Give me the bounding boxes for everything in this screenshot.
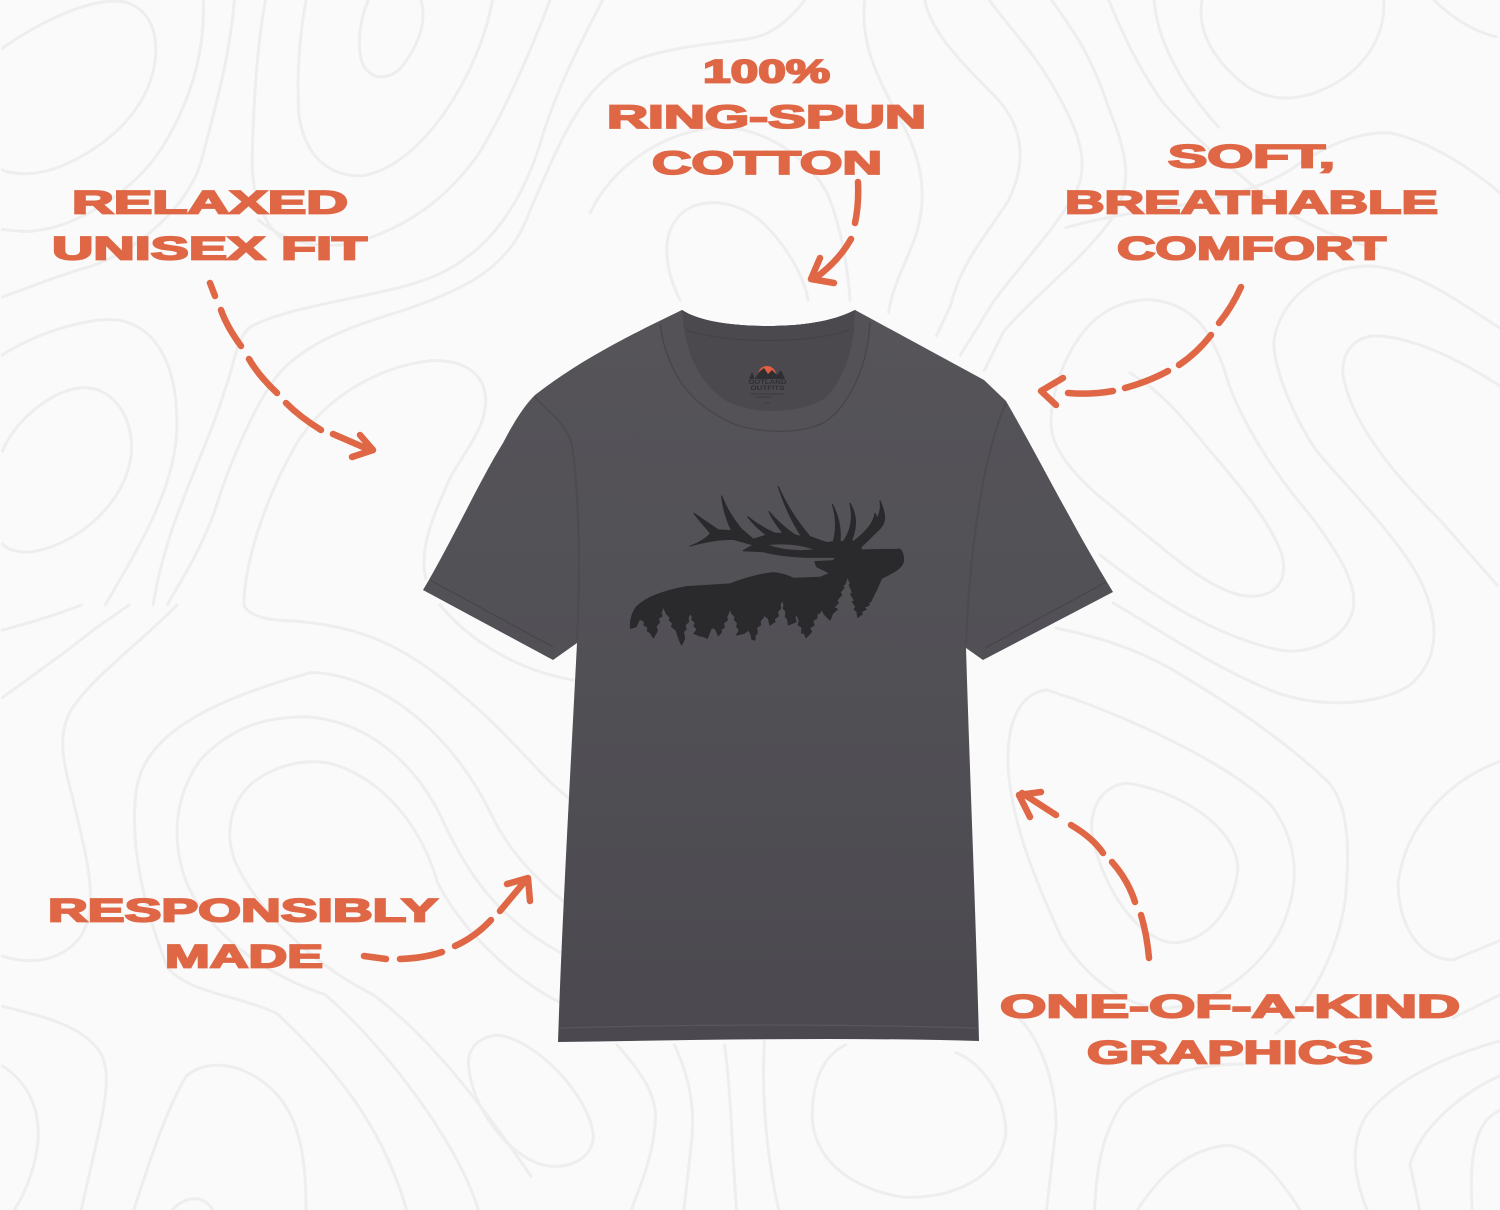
arrow: responsibly made to shirt: [364, 878, 530, 959]
sleeve hem stitches: [430, 580, 1106, 648]
label: responsibly made: MADE: [165, 938, 323, 974]
hem stitch: [560, 1025, 977, 1028]
arrow: comfort to shoulder: [1041, 287, 1241, 405]
label: relaxed unisex fit: UNISEX FIT: [52, 230, 368, 266]
label: one-of-a-kind graphics: ONE-OF-A-KIND: [1000, 988, 1460, 1024]
contours behind collar, real coordinates: [667, 203, 808, 300]
label: soft, breathable comfort: [1065, 138, 1438, 266]
arrow: cotton to collar: [811, 182, 858, 283]
collar outer seam: [660, 322, 870, 431]
collar rib: [660, 310, 870, 432]
label: responsibly made: RESPONSIBLY: [48, 892, 438, 928]
back neck seam: [687, 330, 849, 340]
arrow: relaxed fit to shirt: [210, 283, 373, 457]
label: 100% ring-spun cotton: [607, 54, 926, 181]
label: relaxed unisex fit: [52, 184, 368, 266]
arrow: graphics to shirt: [1019, 792, 1149, 958]
neck label logo: [748, 366, 787, 403]
shirt body: [423, 310, 1113, 1042]
label: soft, breathable comfort: SOFT,: [1168, 138, 1335, 174]
label: 100% ring-spun cotton: COTTON: [652, 145, 882, 181]
neck label logo: OUTFITS: [750, 386, 784, 392]
label: 100% ring-spun cotton: 100%: [703, 54, 830, 90]
elk and forest graphic: [630, 487, 903, 645]
t-shirt: [423, 310, 1113, 1042]
label: soft, breathable comfort: BREATHABLE: [1065, 184, 1438, 220]
label: responsibly made: [48, 892, 438, 974]
sleeve seams and folds: [535, 397, 1006, 645]
label: one-of-a-kind graphics: GRAPHICS: [1087, 1034, 1373, 1070]
neck interior: [682, 310, 855, 411]
label: one-of-a-kind graphics: [1000, 988, 1460, 1070]
neck label logo: OUTLAND: [748, 380, 787, 386]
label: 100% ring-spun cotton: RING-SPUN: [607, 99, 926, 135]
label: relaxed unisex fit: RELAXED: [72, 184, 348, 220]
label: soft, breathable comfort: COMFORT: [1117, 230, 1387, 266]
